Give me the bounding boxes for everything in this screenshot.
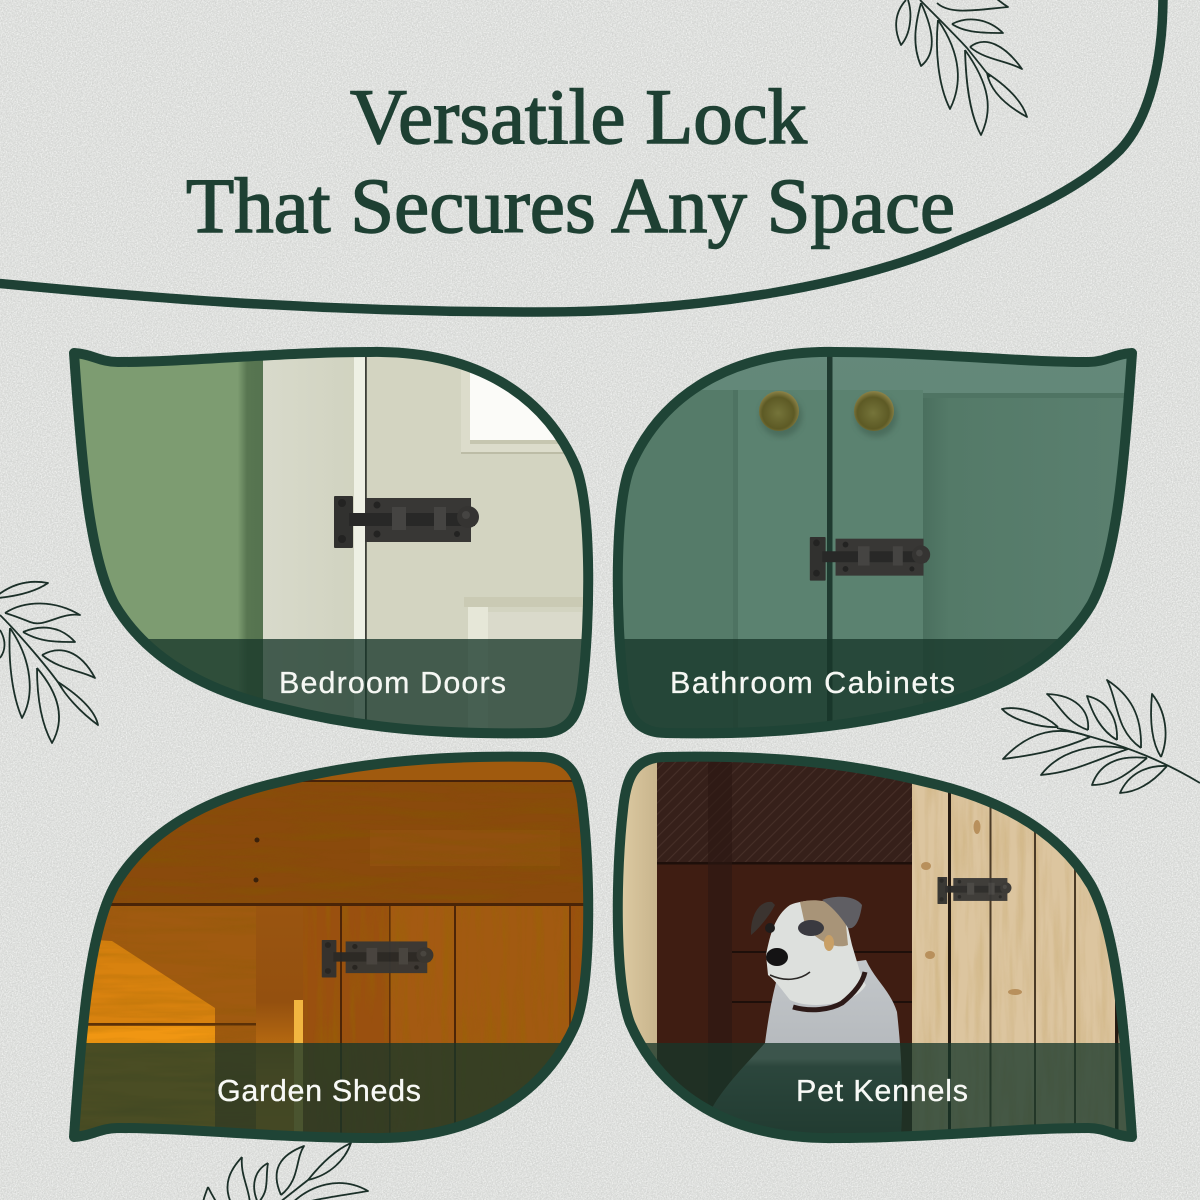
icon: leaf branch bottom xyxy=(203,1143,368,1200)
panel: pet kennels xyxy=(610,750,1150,1153)
label band xyxy=(148,639,582,728)
icon: barrel bolt lock xyxy=(334,496,479,548)
title: Versatile Lock xyxy=(350,73,807,160)
panel: bathroom cabinets xyxy=(610,340,1150,749)
title: That Secures Any Space xyxy=(186,162,955,249)
label: garden sheds: Garden Sheds xyxy=(217,1074,421,1108)
photo: wooden shed door with lock xyxy=(79,762,584,1134)
leaf outline xyxy=(74,352,588,733)
label: pet kennels: Pet Kennels xyxy=(796,1074,968,1108)
icon: leaf branch left xyxy=(0,582,98,743)
wood knots xyxy=(921,820,1022,995)
label: bathroom cabinets: Bathroom Cabinets xyxy=(670,666,955,700)
label band xyxy=(646,1043,1127,1134)
icon: leaf branch top right xyxy=(896,0,1027,135)
label band xyxy=(624,639,1058,728)
label: bedroom doors: Bedroom Doors xyxy=(279,666,506,700)
leaf outline xyxy=(618,352,1132,733)
icon: leaf branch right xyxy=(1002,680,1200,793)
curved header line xyxy=(0,0,1163,312)
photo: dog beside kennel door xyxy=(622,762,1127,1134)
photo: bedroom door with lock xyxy=(79,356,584,728)
title xyxy=(186,73,955,249)
icon: barrel bolt lock xyxy=(810,537,930,581)
panel: bedroom doors xyxy=(69,346,594,738)
leaf outline xyxy=(618,757,1132,1138)
label band xyxy=(79,1043,560,1134)
leaf outline xyxy=(74,757,588,1138)
dog xyxy=(712,897,902,1150)
icon: barrel bolt lock xyxy=(938,877,1011,904)
icon: cabinet knobs xyxy=(759,391,897,437)
icon: barrel bolt lock xyxy=(322,940,433,977)
photo: green cabinet with lock xyxy=(622,356,1127,728)
panel: garden sheds xyxy=(60,750,603,1153)
